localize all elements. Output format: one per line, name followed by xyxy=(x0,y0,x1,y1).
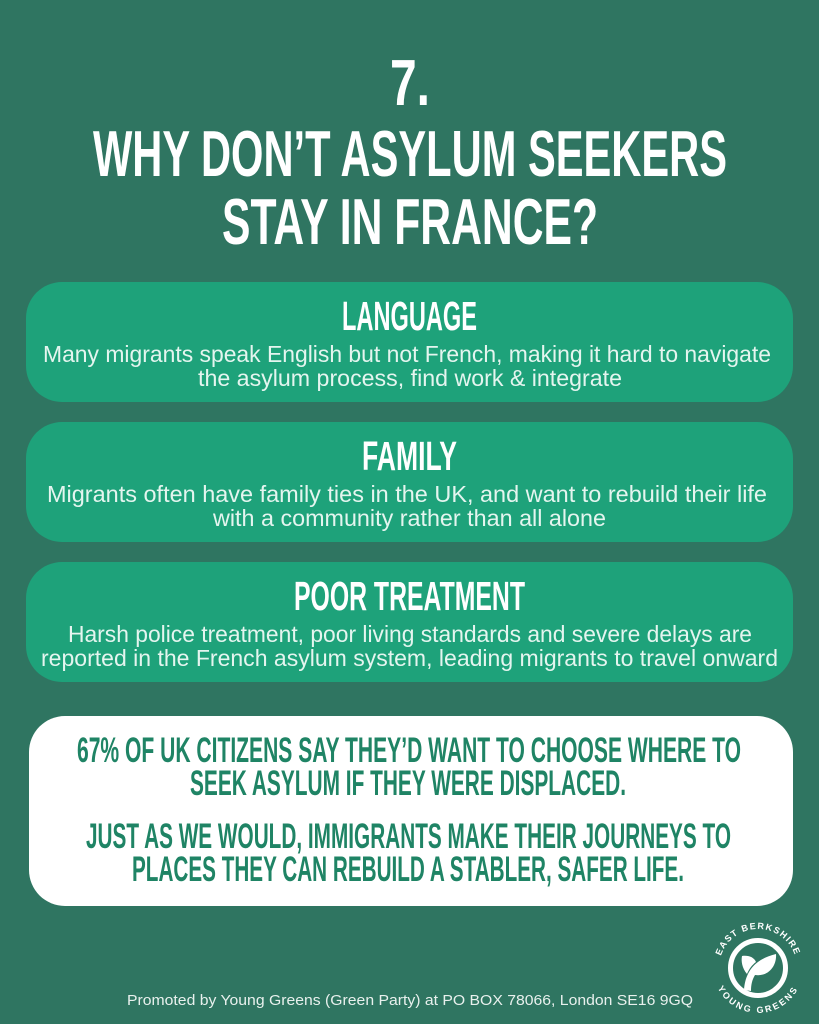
footer: promoted by: Promoted by Young Greens (Green Party) at PO BOX 78066, London SE16 9GQ xyxy=(127,993,693,1009)
text: family body xyxy=(47,481,767,531)
panel: family xyxy=(26,422,793,542)
text: poor treatment body: reported in the French asylum system, leading migrants to travel onward xyxy=(41,645,778,671)
text: language body: Many migrants speak English but not French, making it hard to navigate xyxy=(43,341,771,367)
panel: poor treatment xyxy=(26,562,793,682)
logo: East Berkshire Young Greens xyxy=(715,922,800,1013)
text: poor treatment body xyxy=(41,621,778,671)
title: STAY IN FRANCE? xyxy=(222,185,598,258)
heading: poor treatment: POOR TREATMENT xyxy=(294,573,525,619)
text: language body: the asylum process, find work & integrate xyxy=(198,365,622,391)
title xyxy=(93,46,727,258)
heading: family: FAMILY xyxy=(362,433,457,479)
text: family body: with a community rather than all alone xyxy=(212,505,606,531)
panel: language xyxy=(26,282,793,402)
text: family body: Migrants often have family ties in the UK, and want to rebuild their life xyxy=(47,481,767,507)
icon: sprout xyxy=(742,954,776,991)
logo: East Berkshire Young Greens: YOUNG GREENS xyxy=(718,984,796,1013)
callout: white panel xyxy=(29,716,793,906)
logo: East Berkshire Young Greens: EAST BERKSHIRE xyxy=(715,922,800,956)
text: statistic xyxy=(77,731,741,803)
heading: language: LANGUAGE xyxy=(342,293,477,339)
text: poor treatment body: Harsh police treatment, poor living standards and severe delays are xyxy=(68,621,752,647)
text: conclusion xyxy=(86,817,731,889)
text: language body xyxy=(43,341,771,391)
title: 7. xyxy=(390,46,430,119)
